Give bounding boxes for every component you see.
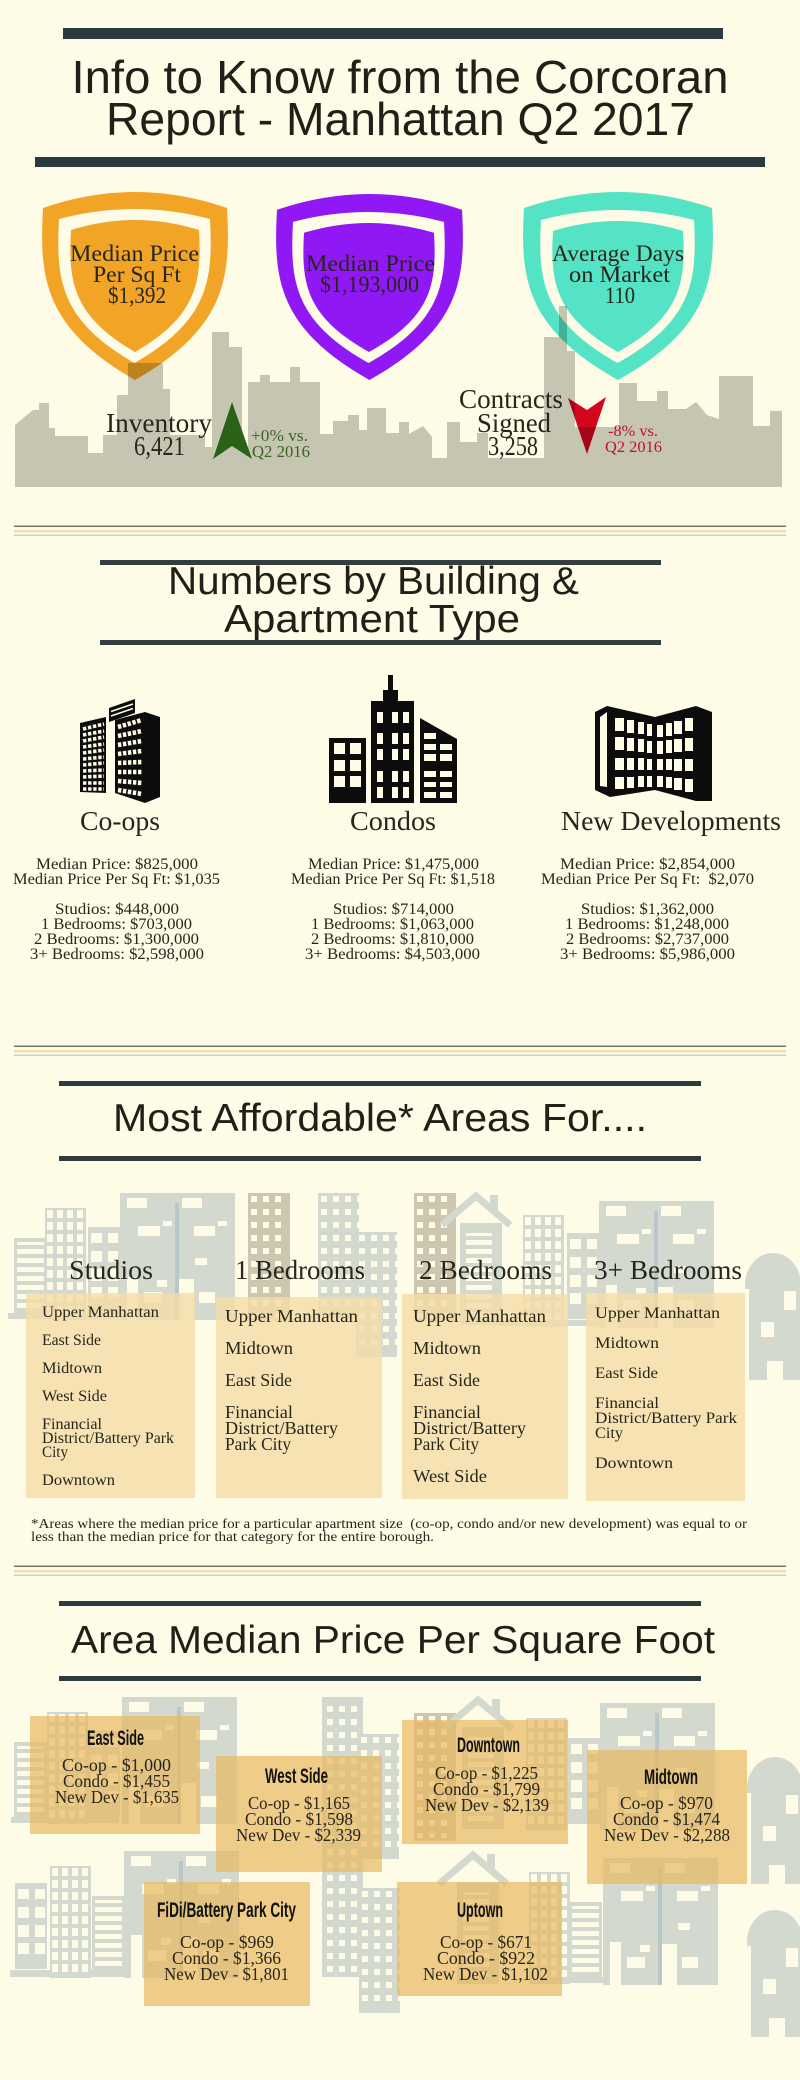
panel: 3+ bedrooms: Midtown xyxy=(595,1335,659,1352)
card: east side: East Side xyxy=(87,1727,144,1750)
skyline xyxy=(15,306,782,487)
shield label: median price: Median Price xyxy=(306,251,435,276)
card: west side xyxy=(216,1756,382,1872)
contracts change: Q2 2016 xyxy=(605,439,662,456)
panel: 2 bedrooms xyxy=(402,1255,568,1499)
title: Info to Know from the Corcoran xyxy=(72,51,728,103)
background buildings: area price section xyxy=(10,1697,800,2037)
shield label: median price per sq ft: $1,392 xyxy=(108,283,166,308)
section rule xyxy=(59,1676,701,1681)
panel: studios: East Side xyxy=(42,1332,101,1349)
card: uptown: Co-op - $671 xyxy=(440,1932,532,1952)
background buildings: affordable section xyxy=(8,1193,800,1380)
contracts signed stat: Contracts xyxy=(459,384,563,414)
section rule xyxy=(59,1601,701,1606)
inventory stat: Inventory xyxy=(106,408,213,438)
card: east side: Co-op - $1,000 xyxy=(62,1755,171,1775)
panel: studios: City xyxy=(42,1444,68,1461)
card: midtown: Condo - $1,474 xyxy=(613,1809,720,1829)
footnote: *Areas where the median price for a particular apartment size (co-op, condo and/or new development) was equal to or xyxy=(31,1517,747,1532)
co-ops column: 1 Bedrooms: $703,000 xyxy=(41,916,192,933)
panel: 3+ bedrooms xyxy=(586,1255,745,1501)
card: uptown: Uptown xyxy=(457,1899,503,1922)
condos column: Median Price Per Sq Ft: $1,518 xyxy=(291,871,495,888)
panel: studios: West Side xyxy=(42,1388,107,1405)
panel: 3+ bedrooms: Financial xyxy=(595,1395,660,1412)
co-ops column: Median Price Per Sq Ft: $1,035 xyxy=(13,871,220,888)
panel: 3+ bedrooms: Upper Manhattan xyxy=(595,1305,720,1322)
section rule xyxy=(59,1156,701,1161)
new developments column: New Developments xyxy=(561,806,781,836)
inventory stat xyxy=(106,408,213,461)
contracts signed stat: Signed xyxy=(477,408,551,438)
section heading: numbers by building: Apartment Type xyxy=(224,598,520,641)
card: midtown: New Dev - $2,288 xyxy=(604,1825,730,1845)
panel: studios: Midtown xyxy=(42,1360,102,1377)
footnote: less than the median price for that category for the entire borough. xyxy=(31,1530,434,1545)
panel: 1 bedrooms: East Side xyxy=(225,1370,292,1390)
contracts change: -8% vs. xyxy=(608,423,658,440)
card: east side: Condo - $1,455 xyxy=(63,1771,170,1791)
panel: 1 bedrooms: Park City xyxy=(225,1434,291,1454)
icon: green up arrow xyxy=(213,402,252,459)
card: east side: New Dev - $1,635 xyxy=(55,1787,179,1807)
card: fidi / battery park city: Co-op - $969 xyxy=(180,1932,274,1952)
card: east side xyxy=(30,1716,200,1834)
new developments column: 1 Bedrooms: $1,248,000 xyxy=(565,916,729,933)
panel: 2 bedrooms: West Side xyxy=(413,1466,487,1486)
panel: 3+ bedrooms: Downtown xyxy=(595,1455,673,1472)
panel: 3+ bedrooms: 3+ Bedrooms xyxy=(594,1255,742,1285)
section rule xyxy=(100,640,661,645)
card: fidi / battery park city xyxy=(144,1882,310,2006)
inventory change: +0% vs. xyxy=(251,426,308,445)
panel: 1 bedrooms: Midtown xyxy=(225,1338,293,1358)
section heading: numbers by building: Numbers by Building & xyxy=(168,560,579,603)
condos column: 2 Bedrooms: $1,810,000 xyxy=(311,931,474,948)
panel: 1 bedrooms: Upper Manhattan xyxy=(225,1306,358,1326)
section heading: most affordable: Most Affordable* Areas For.... xyxy=(113,1097,647,1140)
panel: 2 bedrooms: Upper Manhattan xyxy=(413,1306,546,1326)
co-ops column: Median Price: $825,000 xyxy=(36,856,198,873)
card: midtown: Midtown xyxy=(644,1766,698,1789)
panel: 1 bedrooms: 1 Bedrooms xyxy=(235,1255,365,1285)
shield label: average days on market xyxy=(552,241,684,308)
card: downtown: Co-op - $1,225 xyxy=(435,1763,538,1783)
panel: studios xyxy=(26,1255,195,1498)
card: fidi / battery park city: FiDi/Battery Park City xyxy=(157,1899,296,1922)
inventory stat: 6,421 xyxy=(134,431,185,461)
title xyxy=(72,51,728,145)
co-ops column: Studios: $448,000 xyxy=(55,901,179,918)
co-ops column: 3+ Bedrooms: $2,598,000 xyxy=(30,946,204,963)
panel: 2 bedrooms: Park City xyxy=(413,1434,479,1454)
panel: 3+ bedrooms: East Side xyxy=(595,1365,658,1382)
new developments column: 2 Bedrooms: $2,737,000 xyxy=(566,931,729,948)
contracts signed stat xyxy=(459,384,563,461)
shield label: median price per sq ft: Median Price xyxy=(70,241,199,266)
card: west side: New Dev - $2,339 xyxy=(236,1825,361,1845)
shield label: average days on market: Average Days xyxy=(552,241,684,266)
condos column: 1 Bedrooms: $1,063,000 xyxy=(311,916,474,933)
card: downtown xyxy=(402,1720,568,1844)
icon: red down arrow xyxy=(568,397,606,454)
shield label: median price per sq ft xyxy=(70,241,199,308)
panel: 2 bedrooms: East Side xyxy=(413,1370,480,1390)
new developments column: Median Price Per Sq Ft: $2,070 xyxy=(541,871,754,888)
panel: 2 bedrooms: District/Battery xyxy=(413,1418,526,1438)
section heading: numbers by building xyxy=(168,560,579,641)
panel: studios: District/Battery Park xyxy=(42,1430,174,1447)
card: west side: Co-op - $1,165 xyxy=(248,1793,350,1813)
card: downtown: Condo - $1,799 xyxy=(433,1779,540,1799)
condos column: Median Price: $1,475,000 xyxy=(308,856,479,873)
card: uptown xyxy=(397,1882,562,1996)
new developments column: Median Price: $2,854,000 xyxy=(560,856,735,873)
panel: 1 bedrooms xyxy=(216,1255,382,1498)
panel: 2 bedrooms: 2 Bedrooms xyxy=(419,1255,552,1285)
card: west side: West Side xyxy=(265,1765,328,1788)
top rule xyxy=(63,28,723,39)
condos column: Condos xyxy=(350,806,436,836)
footnote xyxy=(31,1517,747,1545)
card: fidi / battery park city: Condo - $1,366 xyxy=(172,1948,281,1968)
card: downtown: New Dev - $2,139 xyxy=(425,1795,549,1815)
contracts change xyxy=(605,423,662,456)
panel: studios: Downtown xyxy=(42,1472,115,1489)
panel: 3+ bedrooms: District/Battery Park xyxy=(595,1410,737,1427)
panel: studios: Studios xyxy=(69,1255,153,1285)
section heading: area median price: Area Median Price Per Square Foot xyxy=(71,1619,715,1662)
panel: studios: Financial xyxy=(42,1416,102,1433)
inventory change: Q2 2016 xyxy=(252,442,310,461)
card: midtown xyxy=(587,1750,747,1884)
section rule xyxy=(59,1081,701,1086)
title lower rule xyxy=(35,157,765,167)
card: downtown: Downtown xyxy=(457,1734,520,1757)
card: midtown: Co-op - $970 xyxy=(620,1793,713,1813)
section rule xyxy=(100,560,661,565)
card: fidi / battery park city: New Dev - $1,801 xyxy=(164,1964,289,1984)
shield label: average days on market: on Market xyxy=(569,262,671,287)
co-ops column: 2 Bedrooms: $1,300,000 xyxy=(34,931,199,948)
card: uptown: Condo - $922 xyxy=(437,1948,535,1968)
new developments column: 3+ Bedrooms: $5,986,000 xyxy=(560,946,735,963)
shield label: median price xyxy=(306,251,435,297)
shield: median price per sq ft xyxy=(42,192,228,380)
co-ops column: Co-ops xyxy=(80,806,160,836)
icon: co-op buildings xyxy=(80,699,160,803)
shield: median price xyxy=(276,194,463,380)
panel: studios: Upper Manhattan xyxy=(42,1304,159,1321)
condos column: 3+ Bedrooms: $4,503,000 xyxy=(305,946,480,963)
inventory change xyxy=(251,426,310,461)
panel: 1 bedrooms: Financial xyxy=(225,1402,293,1422)
new developments column: Studios: $1,362,000 xyxy=(581,901,714,918)
shield label: median price: $1,193,000 xyxy=(320,272,419,297)
shield label: average days on market: 110 xyxy=(605,283,635,308)
card: uptown: New Dev - $1,102 xyxy=(423,1964,548,1984)
panel: 2 bedrooms: Financial xyxy=(413,1402,481,1422)
icon: new development building xyxy=(595,706,712,801)
shield: average days on market xyxy=(523,192,713,380)
panel: 3+ bedrooms: City xyxy=(595,1425,623,1442)
title: Report - Manhattan Q2 2017 xyxy=(106,93,695,145)
condos column xyxy=(291,806,495,963)
card: west side: Condo - $1,598 xyxy=(245,1809,353,1829)
new developments column xyxy=(541,806,781,963)
contracts signed stat: 3,258 xyxy=(488,431,538,461)
panel: 1 bedrooms: District/Battery xyxy=(225,1418,338,1438)
co-ops column xyxy=(13,806,220,963)
icon: condo buildings xyxy=(329,675,457,803)
condos column: Studios: $714,000 xyxy=(333,901,454,918)
panel: 2 bedrooms: Midtown xyxy=(413,1338,481,1358)
shield label: median price per sq ft: Per Sq Ft xyxy=(93,262,182,287)
